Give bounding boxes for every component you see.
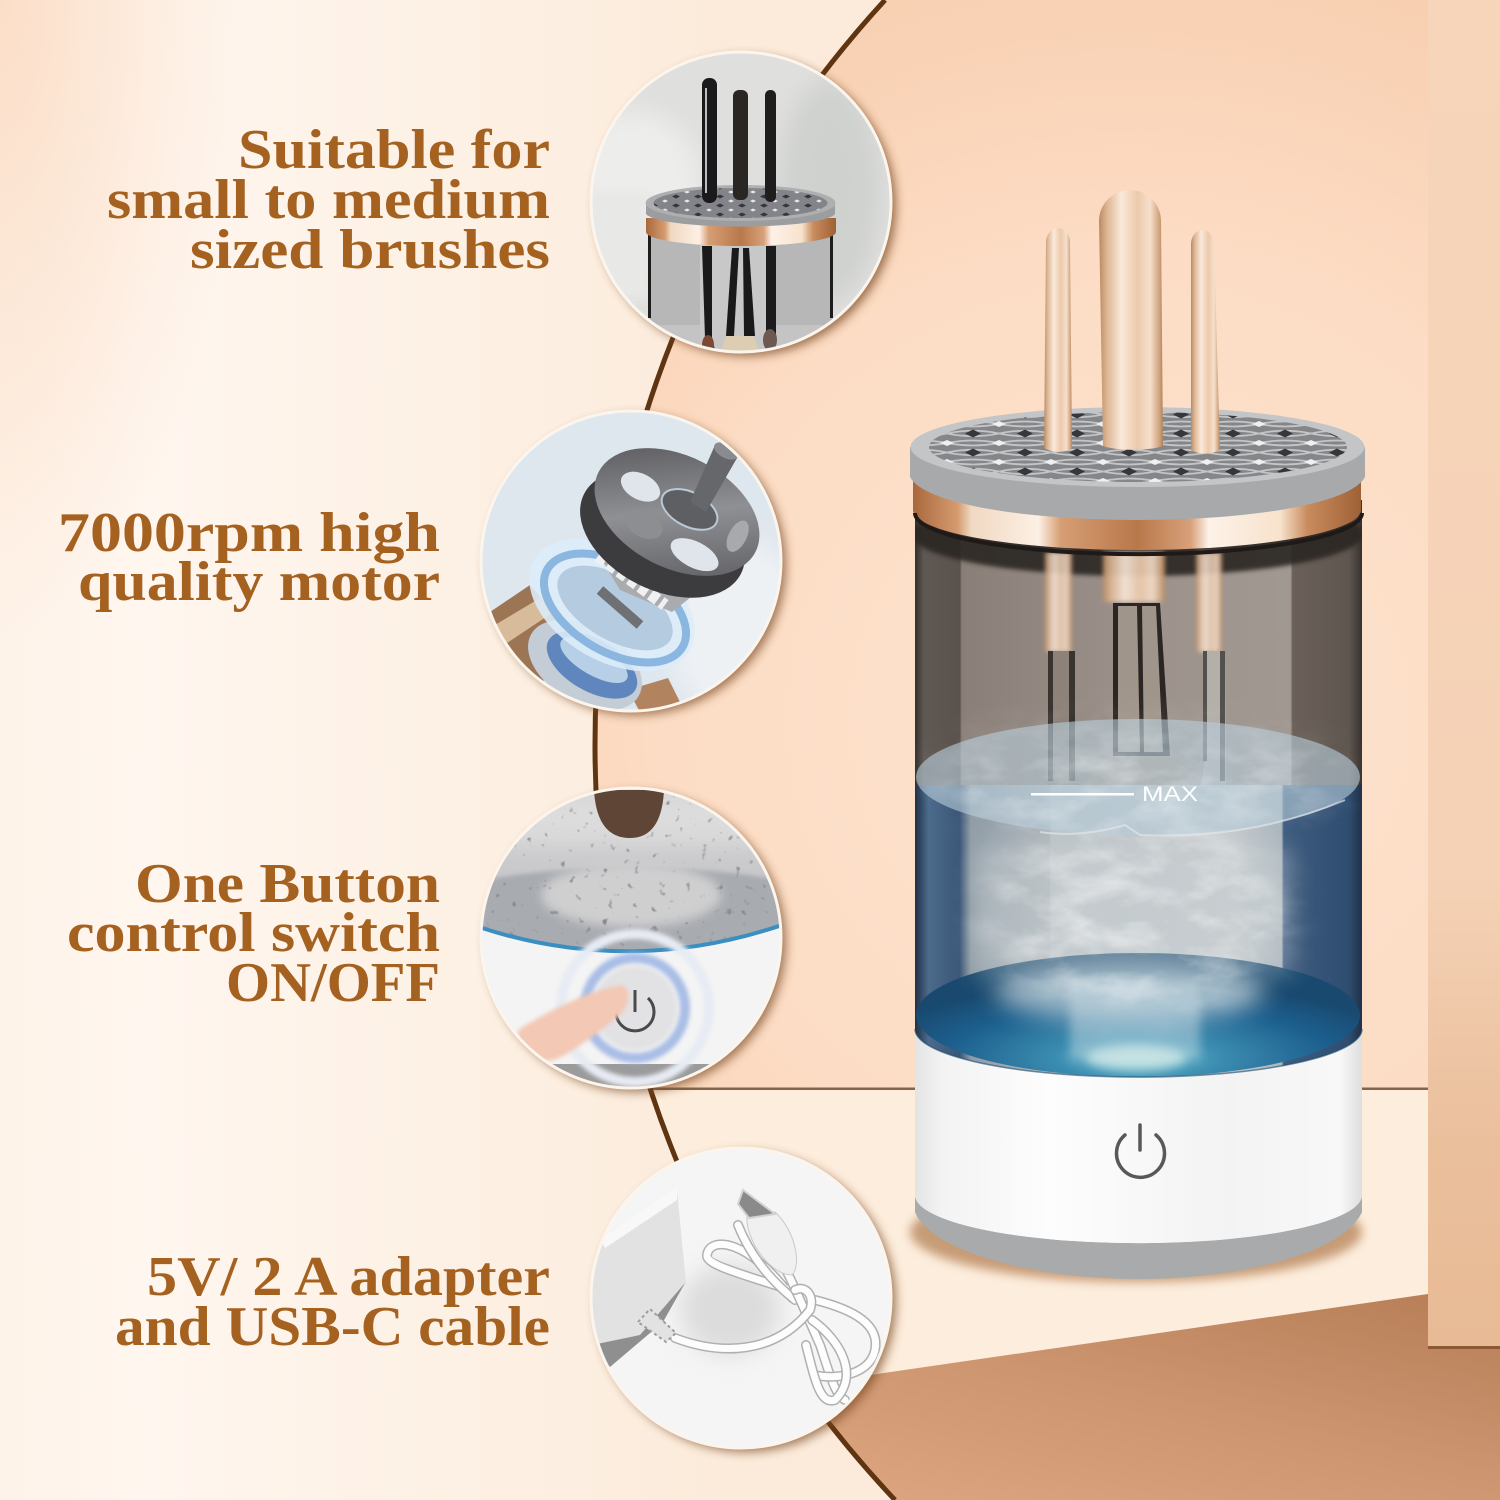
white base <box>915 1020 1362 1243</box>
internal left brush <box>1045 552 1080 790</box>
circle border <box>481 788 781 1088</box>
heading: adapter <box>115 1246 550 1358</box>
spoke holes <box>620 472 749 572</box>
blue swirl <box>530 539 695 671</box>
background: room scene inside large circle <box>590 0 1500 1500</box>
white base top shadow edge <box>915 1029 1362 1077</box>
mini gold ring <box>646 218 836 246</box>
handle: right brush <box>1191 230 1220 454</box>
heading: brushes: Suitable for <box>238 119 550 181</box>
heading: brushes: small to medium <box>107 169 550 231</box>
heading: button: control switch <box>67 902 440 964</box>
circle shadow <box>486 415 786 715</box>
heading: button <box>67 853 440 1014</box>
stator <box>598 554 690 612</box>
circle border <box>591 52 891 352</box>
rim top <box>594 448 760 576</box>
circle shadow <box>596 1152 896 1452</box>
heading: button: ON/OFF <box>226 952 440 1014</box>
product base <box>590 1190 686 1372</box>
blue water line <box>482 925 782 951</box>
heading: brushes: sized brushes <box>190 219 550 281</box>
MAX label: MAX <box>1142 783 1198 806</box>
large circle outline arc <box>595 0 895 1500</box>
gray foot <box>548 1064 722 1090</box>
copper coil lower left <box>491 585 556 681</box>
mini cleaner body <box>648 236 833 325</box>
mini brushes inside <box>702 246 715 348</box>
circle shadow <box>596 56 896 356</box>
heading: motor: 7000rpm high <box>58 502 440 564</box>
circle photo <box>480 786 784 1090</box>
pulse rings <box>561 934 709 1082</box>
water surface <box>916 719 1360 835</box>
water body <box>915 785 1362 1095</box>
power glyph <box>616 990 654 1031</box>
brush tip <box>594 790 664 838</box>
lower blue ring <box>528 620 642 709</box>
usb metal tip <box>738 1190 775 1218</box>
water floor <box>483 868 779 950</box>
surface front edge <box>1040 800 1345 836</box>
usb plug body <box>747 1212 797 1275</box>
base foot <box>915 1192 1362 1279</box>
circle shadow <box>486 792 786 1092</box>
glass body <box>911 492 1363 1100</box>
heading: motor <box>58 502 440 613</box>
contact shadow <box>910 1182 1362 1282</box>
white base front face <box>915 1029 1362 1243</box>
icon: power button <box>1117 1125 1164 1177</box>
circle photo <box>592 54 890 350</box>
MAX line <box>1031 793 1134 796</box>
handle: centre brush <box>1099 190 1163 450</box>
heading: adapter: 5V/ 2 A adapter <box>147 1246 550 1308</box>
mini handles <box>702 78 717 203</box>
lid top rim <box>910 407 1364 487</box>
rotor wheel <box>580 448 760 598</box>
panel: button circle <box>480 786 786 1092</box>
internal right brush <box>1196 552 1226 795</box>
panel: motor circle <box>480 410 810 729</box>
product: electric brush cleaner <box>910 190 1365 1282</box>
mesh grid <box>929 412 1347 482</box>
copper coil lower right <box>634 678 680 710</box>
internal flare <box>1040 755 1205 835</box>
heading: adapter: and USB-C cable <box>115 1296 550 1358</box>
panel: brushes circle <box>560 50 896 362</box>
internal centre brush <box>1103 552 1170 756</box>
handle: left brush <box>1044 228 1072 452</box>
heading: motor: quality motor <box>78 551 440 613</box>
shaft <box>694 446 737 505</box>
white button base <box>482 928 780 1064</box>
circle photo <box>590 1146 894 1450</box>
circle border <box>591 1148 891 1448</box>
rim side <box>580 480 744 598</box>
bundled cable <box>675 1225 876 1401</box>
surface foam <box>938 728 1338 832</box>
panel: cable circle <box>590 1146 896 1452</box>
mini lid <box>646 203 835 227</box>
finger <box>518 985 629 1061</box>
lid <box>910 447 1365 520</box>
circle border <box>481 411 781 711</box>
gold ring bottom line <box>915 513 1362 554</box>
circle photo <box>482 412 780 710</box>
cable strain relief <box>638 1309 676 1342</box>
heading: brushes <box>107 119 550 281</box>
heading: button: One Button <box>135 853 440 915</box>
gold ring <box>913 478 1361 550</box>
hub <box>660 488 718 531</box>
product foot <box>592 1283 685 1367</box>
